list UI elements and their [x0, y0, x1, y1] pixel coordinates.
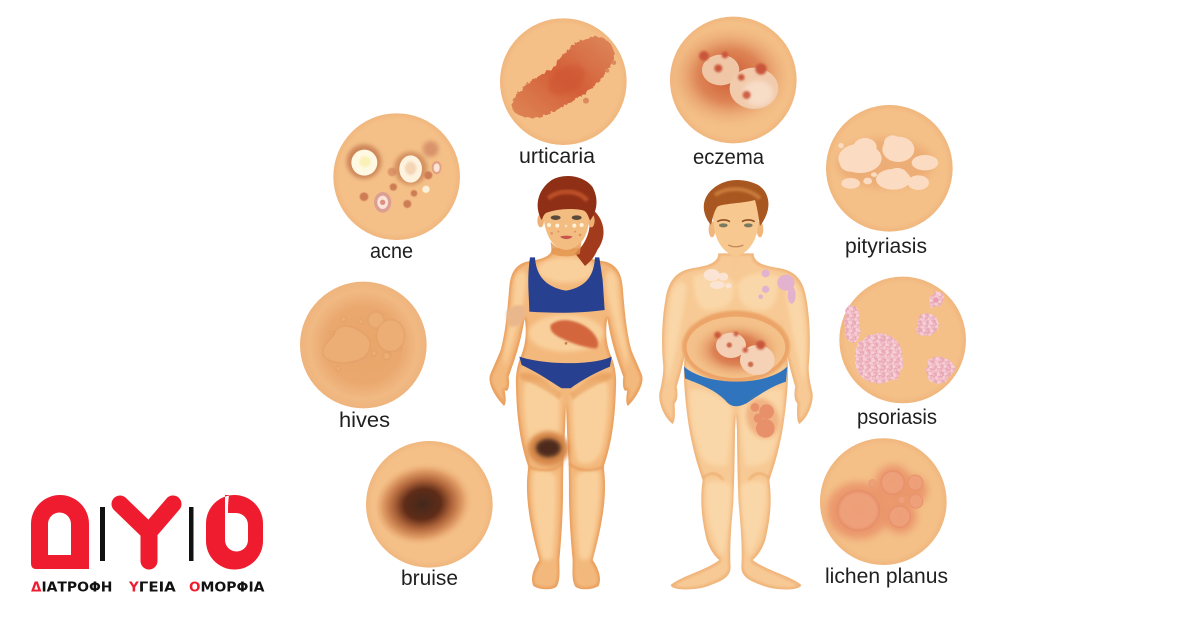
logo divider left	[100, 507, 105, 561]
logo letter delta	[31, 495, 89, 569]
man body	[659, 253, 813, 589]
logo tagline: Ο	[189, 580, 200, 596]
logo tagline: ΙΑΤΡΟΦΗ	[41, 580, 112, 596]
figure: man	[659, 180, 813, 589]
condition circle: pityriasis	[826, 105, 953, 232]
logo letter upsilon	[120, 504, 173, 561]
man head	[704, 180, 768, 257]
logo tagline: ΓΕΙΑ	[139, 580, 176, 596]
condition circle: eczema	[665, 17, 797, 143]
condition circle: bruise	[366, 441, 493, 568]
logo tagline: Δ	[31, 580, 42, 596]
woman body	[489, 248, 643, 589]
woman skin marks	[506, 305, 598, 466]
condition circle: psoriasis	[839, 277, 966, 403]
logo tagline: Υ	[128, 580, 139, 596]
label: acne: acne	[370, 239, 413, 263]
woman head	[537, 176, 604, 266]
man skin marks	[704, 269, 796, 443]
label: hives: hives	[339, 408, 390, 432]
condition circle: acne	[333, 113, 460, 240]
logo letter omicron	[206, 495, 263, 570]
label: eczema: eczema	[693, 145, 764, 169]
man belly eczema patch	[682, 311, 790, 383]
woman swimsuit	[519, 257, 612, 388]
man briefs	[684, 367, 787, 406]
figure: woman	[489, 176, 643, 589]
label: lichen planus: lichen planus	[825, 564, 948, 588]
condition circle: urticaria	[500, 18, 627, 145]
label: urticaria: urticaria	[519, 144, 595, 168]
label: bruise: bruise	[401, 566, 458, 590]
logo tagline: ΜΟΡΦΙΑ	[200, 580, 265, 596]
condition circle: hives	[300, 282, 427, 408]
label: psoriasis: psoriasis	[857, 405, 937, 429]
label: pityriasis: pityriasis	[845, 234, 927, 258]
logo divider right	[189, 507, 194, 561]
logo: DYO	[31, 495, 265, 596]
condition circle: lichen planus	[820, 438, 947, 565]
